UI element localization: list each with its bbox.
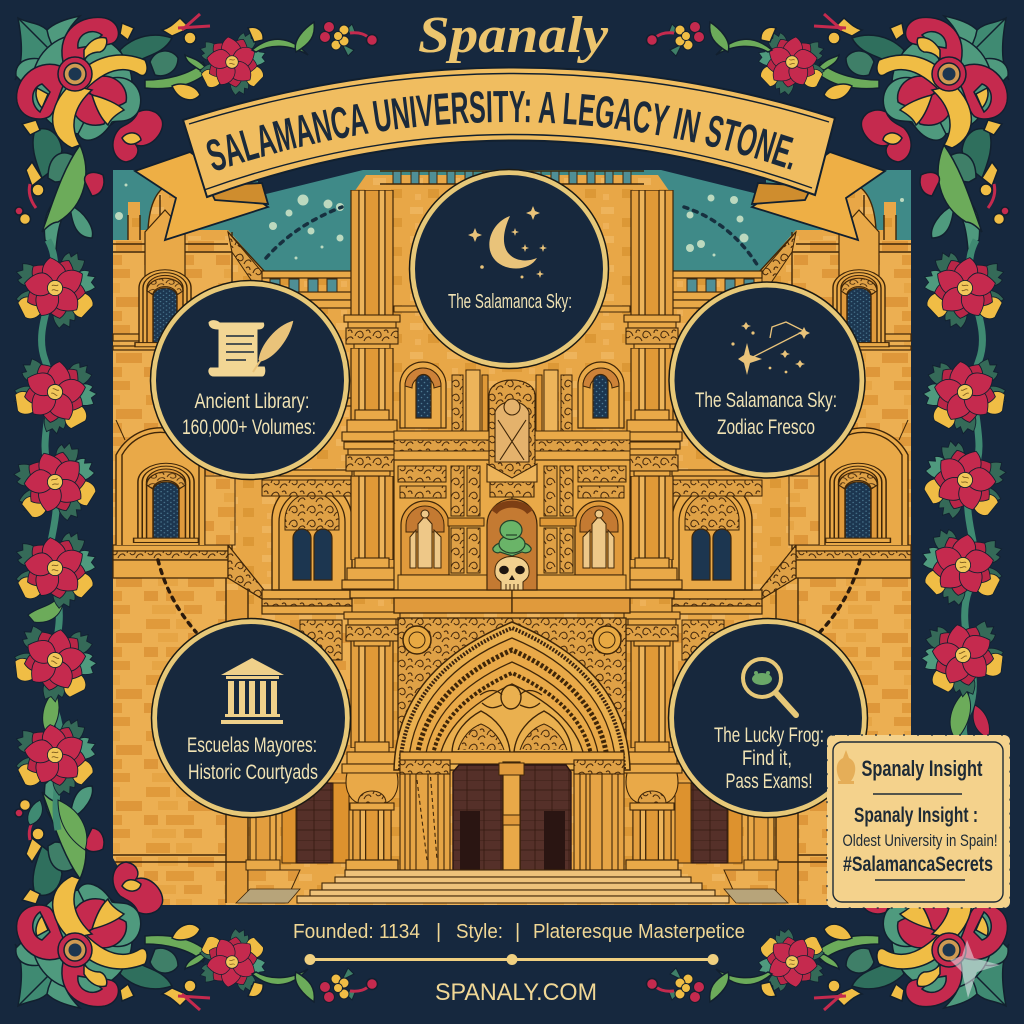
panel: university facade <box>113 171 911 905</box>
icon: magnifier with frog <box>743 659 796 715</box>
navy notch over lower left of facade <box>100 858 140 905</box>
panel: night sky <box>113 170 911 400</box>
insight card: Spanaly Insight : <box>854 804 978 827</box>
footer timeline <box>304 954 718 965</box>
floral border: bottom left corner <box>15 774 378 1010</box>
floral border: bottom right corner <box>646 774 1009 1010</box>
entrance steps <box>297 870 729 903</box>
icon: constellation <box>731 322 810 375</box>
icon: crescent moon and stars <box>468 206 547 278</box>
centre niche with skull and frog <box>487 499 537 590</box>
floral border: top right corner <box>646 14 1009 250</box>
navy band under ribbon <box>258 160 766 196</box>
panel: zodiac fresco: The Salamanca Sky: <box>695 389 837 412</box>
panel: ancient library: Ancient Library: <box>194 390 310 413</box>
icon: skull <box>495 556 529 590</box>
dotted connector lines <box>158 207 860 632</box>
footer facts: Founded: 1134 <box>293 921 420 943</box>
footer facts: Style: <box>456 921 503 943</box>
floral border: top left corner <box>15 14 378 250</box>
panel: zodiac fresco <box>669 282 865 478</box>
panel: the Salamanca sky <box>410 170 608 368</box>
main portal archway <box>394 618 630 770</box>
floral border: left column <box>1 240 109 850</box>
panel: escuelas mayores <box>152 618 350 818</box>
portal jamb columns <box>400 760 624 870</box>
footer facts: | <box>515 921 520 943</box>
facade: left half <box>113 171 512 905</box>
icon: urn <box>837 750 855 784</box>
watermark sparkle <box>950 940 1000 998</box>
panel: lucky frog <box>668 618 868 818</box>
ribbon: left tail <box>135 152 268 240</box>
panel: lucky frog: Pass Exams! <box>726 770 812 793</box>
floral border: right column <box>909 240 1019 745</box>
panel: escuelas mayores: Historic Courtyads <box>188 761 318 784</box>
ribbon: right tail <box>752 152 885 240</box>
brand heading: Spanaly <box>418 7 609 64</box>
insight card: Spanaly Insight <box>862 756 983 781</box>
icon: lucky frog <box>493 520 531 556</box>
facade: right half <box>512 171 911 905</box>
panel: escuelas mayores: Escuelas Mayores: <box>187 734 317 757</box>
panel: the Salamanca sky: The Salamanca Sky: <box>448 291 572 313</box>
footer facts <box>293 921 745 943</box>
icon: classical temple <box>221 658 284 724</box>
ribbon banner <box>133 66 887 242</box>
panel: ancient library: 160,000+ Volumes: <box>182 416 316 439</box>
central upper niche with statue <box>487 380 537 497</box>
panel: lucky frog: Find it, <box>742 747 792 770</box>
panel: lucky frog: The Lucky Frog: <box>714 724 824 747</box>
title: SALAMANCA UNIVERSITY: A LEGACY IN STONE. <box>206 91 794 170</box>
website url: SPANALY.COM <box>435 979 597 1006</box>
footer facts: Plateresque Masterpetice <box>533 921 745 943</box>
wooden portal doors <box>453 762 571 872</box>
ribbon: main band <box>183 67 835 197</box>
panel: ancient library <box>150 280 350 480</box>
panel: zodiac fresco: Zodiac Fresco <box>717 416 815 439</box>
footer facts: | <box>436 921 441 943</box>
icon: scroll and quill <box>208 320 294 377</box>
insight card <box>827 735 1010 908</box>
